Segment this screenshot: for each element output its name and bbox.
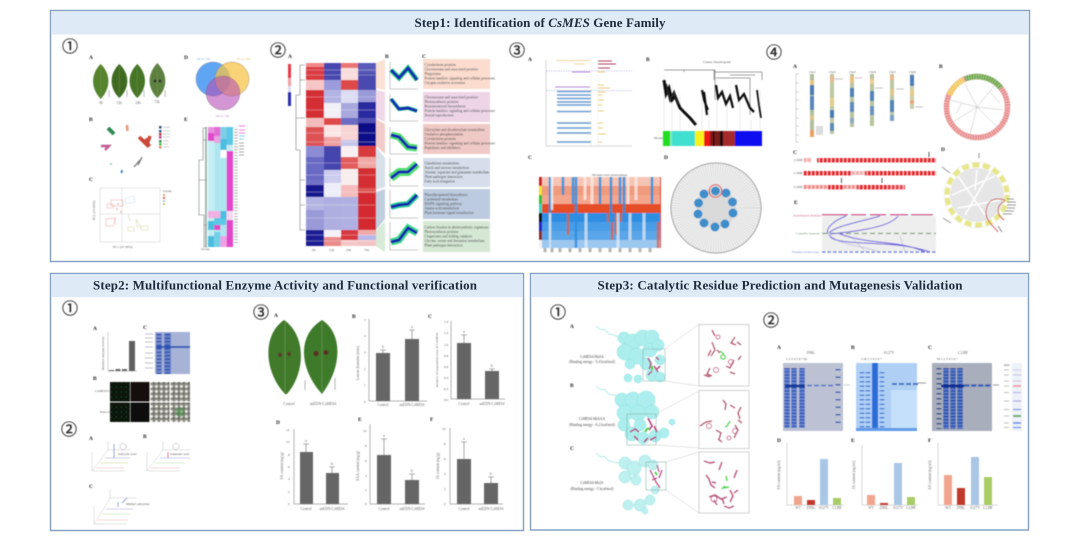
JA content chart: b (490, 472, 492, 476)
SA content chart: 10 (286, 440, 290, 444)
SA content chart: 0 (288, 502, 290, 506)
section 1-4: genome analysis (766, 39, 1016, 254)
expression heatmap: A (288, 54, 292, 60)
chart D: SA content (ng/ml) (777, 460, 781, 490)
SAA content chart (356, 417, 425, 511)
heat column 0h (306, 63, 324, 246)
SA content chart (276, 420, 348, 511)
gel F96L: 1 2 3 4 5 6 7 M (786, 357, 807, 361)
gel S127Y (851, 345, 926, 431)
purification gel: C (143, 325, 147, 331)
enrichment box 2: Brassinosteroid biosynthesis (424, 104, 466, 108)
step 1 title: Step1: Identification of CsMES Gene Family (414, 15, 666, 30)
gel F96L (777, 345, 850, 431)
expression chart: 1.4 (444, 320, 449, 324)
enrichment box 5: Phenylpropanoid biosynthesis (424, 193, 468, 197)
leaves control and silenced: A (274, 313, 278, 319)
chart D: WT (795, 506, 802, 510)
SA content chart: 4 (288, 477, 290, 481)
step 2 title: Step2: Multifunctional Enzyme Activity and Functional verification (93, 278, 478, 292)
enrichment box 1: Cytoskeleton proteins (424, 63, 457, 67)
gel F96L: F96L (807, 351, 816, 355)
marker 3: ③ (253, 299, 269, 323)
enrichment box 3: Glyoxylate and dicarboxylate metabolism (424, 128, 485, 132)
SA content chart: anEDN-CsMES4 (320, 507, 345, 511)
expression chart: 1.0 (444, 343, 449, 347)
marker 2: ② (61, 416, 77, 440)
docking A (569, 324, 699, 386)
enrichment box 6: Glycine, serine and threonine metabolism (424, 239, 485, 244)
marker 1: ① (62, 295, 78, 319)
step 3 header band (531, 274, 1028, 297)
SAA content chart: 0 (365, 502, 367, 506)
spectrum B: Jasmonic acid (170, 452, 189, 456)
PCA plot: Group (163, 189, 172, 193)
collinearity circle: D (941, 147, 945, 153)
docking B (569, 383, 699, 448)
JA content chart: 6 (444, 457, 446, 461)
WGCNA dendrogram: Module colors (654, 136, 674, 140)
activity bar chart: A (93, 326, 97, 332)
gel L128F: C (928, 345, 932, 351)
enrichment box 3 (423, 124, 495, 154)
section 2-1: enzyme expression (62, 295, 190, 422)
marker 1: ① (550, 299, 566, 323)
scatter clusters: B (89, 117, 93, 123)
heat column 72h (358, 63, 376, 246)
spectrum B (143, 434, 190, 471)
sequence alignment: C (793, 150, 797, 156)
sequence alignment: CsMES2 (794, 171, 807, 175)
lesion diameter chart: B (352, 314, 356, 320)
JA content chart (430, 417, 504, 511)
JA content chart: anEDN-CsMES4 (479, 507, 504, 511)
leaves control and silenced (268, 313, 337, 406)
chart D: D (777, 438, 781, 444)
enrichment box 6: Plant-pathogen interaction (424, 244, 463, 248)
enrichment box 6: Chaperones and folding catalysts (424, 234, 473, 238)
JA content chart: 4 (444, 472, 446, 476)
enrichment box 5: Plant hormone signal transduction (424, 211, 474, 215)
enrichment box 2: Chromosome and associated proteins (424, 96, 479, 100)
venn diagram: D (184, 55, 188, 61)
WGCNA dendrogram: B (646, 57, 650, 63)
chart F: D96L (957, 506, 965, 510)
leaves with time labels: 0h (99, 101, 103, 105)
spectrum C (89, 484, 150, 524)
section 3-1: docking models (550, 299, 749, 514)
expression chart: 0.2 (444, 387, 449, 391)
lesion diameter chart: a (411, 325, 413, 329)
lesion diameter chart: 2 (364, 367, 366, 371)
enrichment box 2 (423, 92, 495, 122)
chart E: S127Y (893, 506, 903, 510)
enrichment box 4: Fatty acid elongation (424, 180, 455, 184)
SAA content chart: 6 (365, 459, 367, 463)
marker 1: ① (62, 33, 78, 57)
volcano style plot: A (528, 57, 532, 63)
SAA content chart: 10 (363, 429, 367, 433)
chromosome map: Chr5 (889, 70, 896, 74)
SA content chart: a (305, 439, 307, 443)
lesion diameter chart: 0 (364, 400, 366, 404)
expression heatmap: 72h (364, 248, 369, 252)
protein ladder: kDa (1004, 363, 1010, 367)
heat column 12h (324, 63, 341, 246)
spectrum C: C (89, 484, 93, 490)
SAA content chart: 4 (365, 474, 367, 478)
lesion diameter chart (352, 314, 427, 407)
enrichment box 1: Phagosome (424, 72, 441, 76)
docking C: (Binding energy: -5 kcal/mol) (571, 487, 614, 491)
expression chart: b (491, 364, 493, 368)
circular phylogeny (939, 64, 1008, 138)
venn diagram (184, 55, 250, 118)
heat column 24h (341, 63, 358, 246)
leaves with time labels (89, 55, 165, 105)
chart E: L128F (906, 506, 916, 510)
SAA content chart: SAA content (ng/g) (356, 450, 360, 481)
JA content chart: Control (459, 507, 469, 511)
docking B: B (570, 383, 574, 389)
chart E: JA content (ng/ml) (852, 460, 856, 489)
enrichment box 2: Protein families: signaling and cellular processes (424, 109, 495, 113)
expression chart: 0.0 (444, 398, 449, 402)
enrichment box 1: Oxygen oxidative activation (424, 81, 465, 85)
section 3-2: mutagenesis validation (763, 307, 1022, 510)
chart D: S127Y (819, 506, 829, 510)
enrichment box 3: Oxidative phosphorylation (424, 132, 463, 136)
section 1-2: expression clusters (270, 37, 495, 252)
gel S127Y: B (851, 345, 855, 351)
chromosome map: Chr6 (909, 70, 916, 74)
step 3 title: Step3: Catalytic Residue Prediction and Mutagenesis Validation (598, 278, 963, 292)
chromosome map: Chr2 (829, 70, 836, 74)
leaves with time labels: 72h (154, 100, 160, 104)
spectrum A (89, 436, 137, 471)
spectrum B: B (143, 434, 147, 440)
chromosome map: A (793, 64, 797, 70)
docking C (570, 446, 699, 514)
venn diagram: 0h vs 12h (197, 57, 210, 61)
lesion diameter chart: anEDN-CsMES4 (400, 403, 425, 407)
SAA content chart: anEDN-CsMES4 (400, 507, 425, 511)
chart F: WT (945, 506, 952, 510)
leaves control and silenced: Control (283, 402, 295, 406)
SA content chart: 6 (288, 465, 290, 469)
chart F: L128F (983, 506, 993, 510)
lesion diameter chart: 1 (364, 383, 366, 387)
panel: step 3 (530, 274, 1028, 530)
expression chart: Control (459, 402, 469, 406)
enrichment box 5: Amino acid metabolism (424, 206, 459, 210)
PCA plot: PC1 (47.38%) (113, 245, 132, 249)
PCA plot: C (89, 177, 93, 183)
enrichment box 5: Carotenoid metabolism (424, 198, 458, 202)
PCA plot (89, 177, 172, 249)
expression chart: a (463, 330, 465, 334)
SA content chart: b (331, 462, 333, 466)
JA content chart: 10 (442, 427, 446, 431)
enrichment box 4: Glutathione metabolism (424, 162, 459, 166)
chart D: L128F (832, 506, 842, 510)
enrichment box 6: Carbon fixation in photosynthetic organisms (424, 226, 489, 230)
enrichment box 4: Alanine, aspartate and glutamate metabolism (424, 170, 489, 176)
SA content chart: 12 (286, 428, 290, 432)
venn diagram: 0h vs 72h (216, 114, 229, 118)
expression chart (428, 314, 505, 406)
spectrum A: A (89, 436, 93, 442)
gel L128F: M 1 2 3 4 5 6 7 (937, 357, 958, 361)
step 2 header band (51, 274, 523, 297)
docking C: CsMES4-MeJA (581, 481, 604, 485)
circular phylogeny: B (939, 64, 943, 70)
cluster connectors (376, 59, 385, 252)
expression chart: 0.6 (444, 365, 449, 369)
chart F: F (928, 438, 932, 444)
chromosome map: Chr1 (809, 70, 816, 74)
expression chart: C (428, 314, 432, 320)
zoom box B (699, 390, 749, 448)
expression chart: Relative of expression level of CsMES4 (435, 332, 439, 387)
subcellular localisation images: Free GFP (100, 410, 113, 414)
enrichment box 1: Chromosome and associated proteins (424, 68, 479, 72)
SA content chart: Control (301, 507, 311, 511)
chart E: WT (868, 506, 875, 510)
panel: step 1 (50, 10, 1030, 262)
sequence alignment: CsMES3 (794, 185, 807, 189)
chromosome map: Chr3 (849, 70, 856, 74)
lesion diameter chart: 5 (364, 318, 366, 322)
scatter clusters (89, 117, 170, 173)
expression heatmap (288, 54, 376, 252)
expression chart: 1.2 (444, 331, 449, 335)
section 1-1: transcriptome overview (62, 33, 250, 251)
enrichment box 4 (423, 158, 490, 187)
chart D (777, 438, 844, 510)
docking A: (Binding energy: -5.4 kcal/mol) (569, 360, 616, 364)
step 1 header band (51, 11, 1029, 34)
enrichment box 5: MAPK signaling pathway (424, 202, 462, 206)
chart E (851, 438, 918, 510)
expression heatmap: 0h (312, 248, 316, 252)
marker 2: ② (763, 307, 779, 331)
lesion diameter chart: Control (378, 403, 388, 407)
gel L128F (928, 345, 999, 431)
JA content chart: 0 (444, 502, 446, 506)
enrichment box 3: Cytoskeleton proteins (424, 137, 457, 141)
sequence alignment (793, 150, 936, 190)
chart E: E (851, 438, 855, 444)
venn diagram: 0h vs 24h (237, 57, 250, 61)
hub gene network: D (664, 155, 668, 161)
module trait heatmap: Module-trait relationships (592, 173, 628, 177)
section 1-3: co-expression network (509, 37, 762, 253)
enrichment box 2: Photosynthesis proteins (424, 100, 459, 104)
gel S127Y: S127Y (884, 351, 895, 355)
chart F: SA content (ng/ml) (928, 460, 932, 490)
cluster trend plots: B (385, 54, 389, 60)
protein ladder (1004, 363, 1022, 431)
enrichment box 5 (423, 189, 490, 219)
JA content chart: a (463, 437, 465, 441)
lesion diameter chart: 4 (364, 334, 366, 338)
synteny: Populus trichocarpa (792, 250, 820, 254)
synteny: Arabidopsis thaliana (793, 214, 821, 218)
hub gene network (664, 155, 761, 253)
enrichment box 6: Photosynthesis proteins (424, 230, 459, 234)
SAA content chart: 8 (365, 444, 367, 448)
chromosome map (793, 64, 923, 142)
chart F (928, 438, 998, 510)
JA content chart: 2 (444, 487, 446, 491)
enrichment box 1 (423, 59, 495, 89)
spectrum C: Methyl salicylate (126, 502, 150, 506)
enrichment box 3: Peptidases and inhibitors (424, 146, 461, 150)
subcellular localisation images: B (93, 376, 97, 382)
synteny: Camellia sinensis (796, 232, 821, 236)
SA content chart: 2 (288, 490, 290, 494)
SA content chart: 8 (288, 453, 290, 457)
enrichment box 1: Protein families: signaling and cellular processes (424, 76, 495, 80)
SAA content chart: a (383, 434, 385, 438)
enrichment box 3: Protein families: signaling and cellular processes (424, 142, 495, 146)
clustered heatmap: E (184, 117, 188, 123)
expression chart: 0.8 (444, 354, 449, 358)
section 2-3: functional verification (253, 299, 505, 511)
SAA content chart: Control (379, 507, 389, 511)
enrichment box 6 (422, 54, 490, 252)
sequence alignment: CsMES1 (794, 158, 807, 162)
chart D: D96L (807, 506, 815, 510)
enrichment box 6: C (422, 54, 426, 60)
JA content chart: 8 (444, 442, 446, 446)
chromosome map: Chr4 (869, 70, 876, 74)
zoom box A (699, 324, 749, 386)
SAA content chart: E (358, 417, 362, 423)
collinearity circle (941, 147, 1016, 232)
docking A: A (570, 324, 574, 330)
spectrum A: Salicylic acid (118, 452, 137, 456)
leaves with time labels: A (89, 55, 93, 61)
cluster trend plots (385, 54, 418, 250)
gel F96L: A (777, 345, 781, 351)
SA content chart: SA content (ng/g) (280, 452, 284, 480)
synteny: E (794, 200, 798, 206)
activity bar chart (93, 326, 137, 371)
enrichment box 2: Sexual reproduction (424, 114, 454, 118)
docking B: CsMES4-MeSAA (579, 417, 605, 421)
marker 3: ③ (509, 37, 525, 61)
chart F: S127Y (970, 506, 980, 510)
SAA content chart: 2 (365, 488, 367, 492)
enrichment box 4: Starch and sucrose metabolism (424, 166, 469, 170)
expression chart: anEDN-CsMES4 (480, 402, 505, 406)
panel: step 2 (50, 274, 524, 530)
leaves control and silenced: anEDN-CsMES4 (310, 402, 336, 406)
JA content chart: F (430, 417, 434, 423)
subcellular localisation images: CsMES4-GFP (95, 389, 115, 393)
SAA content chart: b (411, 469, 413, 473)
lesion diameter chart: b (382, 345, 384, 349)
SA content chart: D (276, 420, 280, 426)
synteny (792, 200, 936, 254)
WGCNA dendrogram (646, 57, 762, 146)
expression chart: 0.4 (444, 376, 449, 380)
zoom box C (699, 452, 749, 513)
expression heatmap: 24h (346, 248, 351, 252)
enrichment box 4: Plant-pathogen interaction (424, 175, 463, 179)
subcellular localisation images (93, 376, 190, 422)
marker 4: ④ (766, 39, 782, 63)
clustered heatmap (184, 117, 245, 251)
section 2-2: mass spectra (61, 416, 190, 524)
volcano style plot (528, 57, 632, 146)
marker 2: ② (270, 37, 286, 61)
chart E: D96L (880, 506, 888, 510)
docking B: (Binding energy: -6.2 kcal/mol) (569, 423, 616, 427)
docking A: CsMES4-MeSA (580, 355, 604, 359)
gel L128F: L128F (958, 351, 968, 355)
lesion diameter chart: 3 (364, 350, 366, 354)
leaves with time labels: 12h (116, 101, 122, 105)
activity bar chart: Relative enzyme activity (101, 336, 105, 370)
expression heatmap: 12h (329, 248, 334, 252)
PCA plot: PC2 (15.89%) (92, 201, 96, 220)
module trait heatmap: C (528, 155, 532, 161)
leaves with time labels: 24h (135, 101, 141, 105)
gel S127Y: 1 M 2 3 4 5 6 7 (861, 357, 882, 361)
JA content chart: JA content (ng/g) (436, 452, 440, 479)
lesion diameter chart: Lesion diameter (mm) (356, 345, 360, 380)
module trait heatmap (528, 155, 661, 252)
docking C: C (570, 446, 574, 452)
WGCNA dendrogram: Cluster Dendrogram (703, 60, 731, 64)
clustered heatmap: Group (201, 247, 210, 251)
